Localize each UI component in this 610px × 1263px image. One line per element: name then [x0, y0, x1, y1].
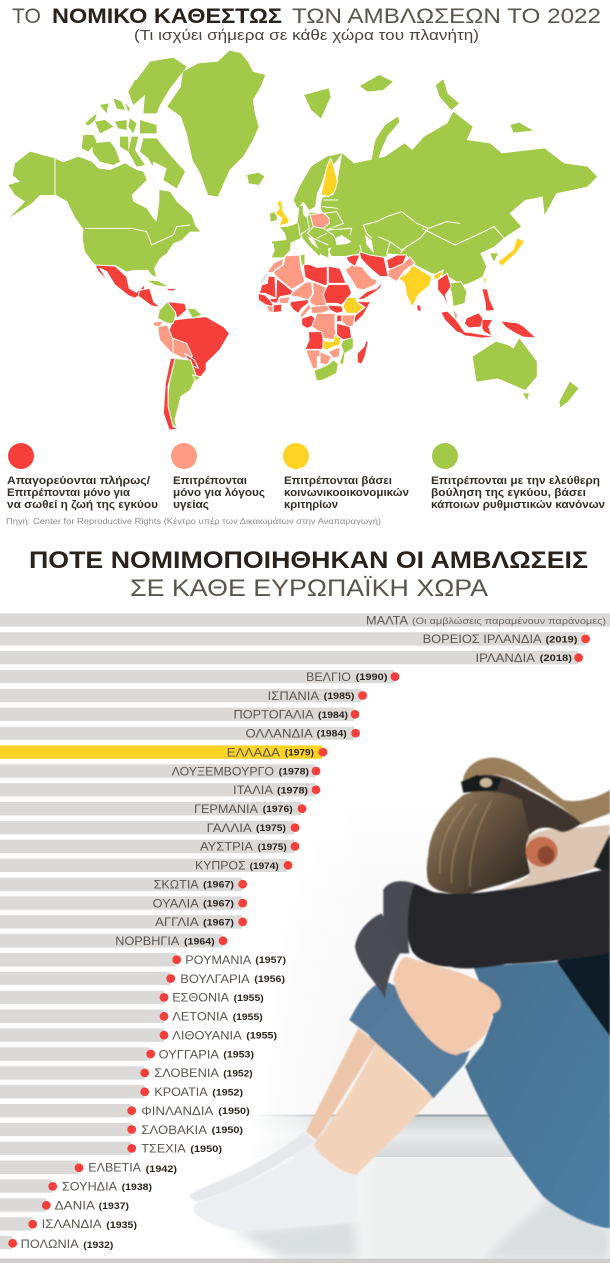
- row: Italy: (1978): [277, 785, 308, 796]
- row: Lithuania: [0, 1028, 277, 1042]
- row: Portugal: [0, 708, 359, 722]
- mongolia and china borders: [422, 227, 506, 245]
- row: Latvia: ΛΕΤΟΝΙΑ: [172, 1010, 228, 1024]
- black sea and caspian: [335, 235, 374, 253]
- legend item: green: βούληση της εγκύου, βάσει: [431, 487, 586, 499]
- row: France: (1975): [256, 823, 286, 834]
- row: Latvia: (1955): [233, 1012, 263, 1023]
- greenland: [167, 51, 265, 197]
- row: Malta: [0, 613, 610, 627]
- row: Estonia: [0, 991, 264, 1005]
- row: France: [0, 821, 299, 835]
- legend item: yellow: [283, 443, 409, 511]
- row: Greece (highlight): [0, 745, 327, 759]
- row: Romania: (1957): [255, 955, 286, 966]
- scandinavia: [294, 153, 342, 210]
- south america: [167, 317, 230, 380]
- row: Romania: [0, 953, 286, 967]
- title: ΝΟΜΙΚΟ ΚΑΘΕΣΤΩΣ: [52, 5, 282, 28]
- row: Croatia: ΚΡΟΑΤΙΑ: [154, 1085, 208, 1099]
- legend item: yellow: κριτηρίων: [284, 499, 338, 511]
- row: Northern Ireland: ΒΟΡΕΙΟΣ ΙΡΛΑΝΔΙΑ: [423, 632, 542, 646]
- row: Greece (highlight): (1979): [285, 748, 314, 759]
- row: Slovenia: (1952): [223, 1068, 253, 1079]
- row: Switzerland: (1942): [146, 1164, 177, 1175]
- source: Πηγή: Center for Reproductive Rights (Κέντρο υπέρ των Δικαιωμάτων στην Αναπαραγωγή): [6, 516, 381, 526]
- row: Portugal: ΠΟΡΤΟΓΑΛΙΑ: [234, 708, 314, 722]
- row: Denmark: [0, 1198, 129, 1212]
- row: Wales: (1967): [203, 899, 234, 910]
- row: Wales: [0, 896, 247, 910]
- row: Denmark: ΔΑΝΙΑ: [55, 1198, 95, 1212]
- row: Northern Ireland: (2019): [546, 634, 578, 645]
- north america and arctic islands: [8, 58, 200, 277]
- row: Spain: (1985): [324, 691, 354, 702]
- legend item: salmon: Επιτρέπονται: [173, 475, 247, 487]
- legend item: yellow: κοινωνικοοικονομικών: [284, 487, 409, 499]
- row: Sweden: ΣΟΥΗΔΙΑ: [62, 1179, 117, 1193]
- row: Scotland: [0, 878, 247, 892]
- legend item: salmon: υγείας: [173, 499, 209, 511]
- row: Spain: ΙΣΠΑΝΙΑ: [268, 689, 319, 703]
- row: Cyprus: (1974): [250, 861, 279, 872]
- row: Czechia: ΤΣΕΧΙΑ: [141, 1142, 186, 1156]
- row: Estonia: ΕΣΘΟΝΙΑ: [172, 991, 229, 1005]
- row: Slovakia: ΣΛΟΒΑΚΙΑ: [141, 1123, 207, 1137]
- ireland: [270, 212, 277, 222]
- row: Luxembourg: [0, 764, 320, 778]
- row: Spain: [0, 689, 367, 703]
- row: Ireland: (2018): [540, 653, 572, 664]
- photo: seated woman: [0, 758, 610, 1258]
- legend item: yellow: Επιτρέπονται βάσει: [284, 475, 392, 487]
- row: Cyprus: ΚΥΠΡΟΣ: [195, 859, 246, 873]
- row: Norway: ΝΟΡΒΗΓΙΑ: [115, 934, 179, 948]
- row: Croatia: [0, 1085, 243, 1099]
- row: Italy: ΙΤΑΛΙΑ: [233, 783, 273, 797]
- world map: [8, 51, 597, 430]
- row: Germany: (1976): [263, 804, 293, 815]
- legend item: salmon: [171, 443, 265, 511]
- northern islands: [247, 75, 533, 185]
- section heading: ΣΕ ΚΑΘΕ ΕΥΡΩΠΑΪΚΗ ΧΩΡΑ: [130, 575, 488, 602]
- row: Estonia: (1955): [234, 993, 264, 1004]
- row: Poland: (1932): [83, 1240, 113, 1251]
- row: Slovakia: [0, 1123, 243, 1137]
- row: Netherlands: ΟΛΛΑΝΔΙΑ: [246, 726, 313, 740]
- foxe basin, borders and mexico: [55, 158, 190, 298]
- row: Switzerland: [0, 1161, 177, 1175]
- row: Germany: [0, 802, 306, 816]
- legend item: red: Απαγορεύονται πλήρως/: [7, 475, 150, 487]
- row: Iceland: [0, 1217, 137, 1231]
- row: Sweden: [0, 1179, 152, 1193]
- row: Poland: [0, 1236, 113, 1251]
- title: ΤΩΝ ΑΜΒΛΩΣΕΩΝ ΤΟ 2022: [292, 5, 601, 28]
- legend item: red: [7, 443, 158, 511]
- row: Lithuania: ΛΙΘΟΥΑΝΙΑ: [172, 1028, 242, 1042]
- row: Ireland: [0, 651, 583, 665]
- legend item: green: [431, 443, 605, 511]
- legend item: salmon: μόνο για λόγους: [173, 487, 265, 499]
- bottom band: [0, 1258, 610, 1263]
- row: Croatia: (1952): [212, 1087, 243, 1098]
- row: Austria: [0, 840, 299, 854]
- uk: [275, 201, 289, 226]
- legend item: green: Επιτρέπονται με την ελεύθερη: [431, 475, 600, 487]
- legend item: green: κάποιων ρυθμιστικών κανόνων: [431, 499, 605, 511]
- row: Denmark: (1937): [99, 1201, 129, 1212]
- row: Czechia: [0, 1142, 222, 1156]
- row: Ireland: ΙΡΛΑΝΔΙΑ: [476, 651, 535, 665]
- bar chart: years by country: [0, 613, 610, 1251]
- row: Norway: (1964): [184, 936, 215, 947]
- subtitle: (Τι ισχύει σήμερα σε κάθε χώρα του πλανήτη): [134, 27, 479, 44]
- row: Scotland: ΣΚΩΤΙΑ: [154, 878, 199, 892]
- legend item: red: να σωθεί η ζωή της εγκύου: [7, 499, 158, 511]
- row: Iceland: ΙΣΛΑΝΔΙΑ: [42, 1217, 102, 1231]
- row: Greece (highlight): ΕΛΛΑΔΑ: [227, 745, 280, 759]
- row: Romania: ΡΟΥΜΑΝΙΑ: [185, 953, 251, 967]
- row: Poland: ΠΟΛΩΝΙΑ: [21, 1237, 79, 1251]
- legend item: red: Επιτρέπονται μόνο για: [7, 487, 130, 499]
- finland: [321, 158, 338, 197]
- row: Slovenia: [0, 1066, 253, 1080]
- row: Malta: (Οι αμβλώσεις παραμένουν παράνομες): [412, 616, 606, 627]
- row: Austria: ΑΥΣΤΡΙΑ: [200, 840, 253, 854]
- row: England: [0, 915, 247, 929]
- row: Belgium: ΒΕΛΓΙΟ: [306, 670, 351, 684]
- central america and hispaniola: [138, 288, 176, 307]
- row: Austria: (1975): [258, 842, 287, 853]
- row: Bulgaria: (1956): [254, 974, 285, 985]
- africa and middle east: [258, 252, 415, 381]
- row: Slovenia: ΣΛΟΒΕΝΙΑ: [154, 1066, 219, 1080]
- row: Luxembourg: (1978): [279, 766, 309, 778]
- row: Sweden: (1938): [122, 1182, 152, 1193]
- section heading: ΠΟΤΕ ΝΟΜΙΜΟΠΟΙΗΘΗΚΑΝ ΟΙ ΑΜΒΛΩΣΕΙΣ: [29, 547, 588, 574]
- row: England: (1967): [203, 917, 234, 928]
- row: Bulgaria: ΒΟΥΛΓΑΡΙΑ: [180, 972, 250, 986]
- europe: [272, 183, 387, 257]
- row: Finland: (1950): [218, 1106, 250, 1117]
- row: Latvia: [0, 1010, 263, 1024]
- americas south and asia pacific: [138, 238, 578, 430]
- row: Wales: ΟΥΑΛΙΑ: [153, 896, 199, 910]
- row: Belgium: [0, 670, 399, 684]
- row: Hungary: ΟΥΓΓΑΡΙΑ: [159, 1047, 219, 1061]
- row: Switzerland: ΕΛΒΕΤΙΑ: [88, 1161, 141, 1175]
- row: Czechia: (1950): [190, 1144, 222, 1155]
- row: Italy: [0, 783, 320, 797]
- australia: [473, 338, 537, 390]
- poland: [310, 213, 329, 228]
- row: Bulgaria: [0, 972, 285, 986]
- row: Belgium: (1990): [356, 672, 388, 683]
- row: Netherlands: [0, 726, 360, 740]
- row: Finland: ΦΙΝΛΑΝΔΙΑ: [141, 1104, 213, 1118]
- row: Netherlands: (1984): [317, 729, 347, 740]
- row: Norway: [0, 934, 227, 948]
- row: Finland: [0, 1104, 250, 1118]
- row: Scotland: (1967): [203, 880, 234, 891]
- row: Hungary: (1953): [223, 1050, 254, 1060]
- row: Slovakia: (1950): [212, 1125, 243, 1136]
- east asia islands: [490, 253, 498, 262]
- row: Northern Ireland: [0, 632, 590, 646]
- row: Malta: ΜΑΛΤΑ: [366, 613, 408, 627]
- south and south-east asia: [399, 265, 432, 307]
- section heading: [29, 547, 588, 602]
- row: Cyprus: [0, 859, 292, 873]
- row: Germany: ΓΕΡΜΑΝΙΑ: [194, 802, 258, 816]
- title: [12, 5, 601, 28]
- row: Lithuania: (1955): [246, 1031, 277, 1042]
- row: Luxembourg: ΛΟΥΞΕΜΒΟΥΡΓΟ: [172, 764, 274, 778]
- indonesia and philippines: [442, 289, 535, 338]
- row: England: ΑΓΓΛΙΑ: [155, 915, 199, 929]
- row: France: ΓΑΛΛΙΑ: [207, 821, 252, 835]
- legend: [7, 443, 605, 511]
- seas, borders and european countries: [270, 200, 460, 255]
- row: Portugal: (1984): [318, 710, 348, 721]
- row: Hungary: [0, 1047, 254, 1061]
- cuba: [148, 281, 168, 287]
- row: Iceland: (1935): [106, 1220, 137, 1231]
- russia and asia: [338, 112, 597, 285]
- title: ΤΟ: [12, 5, 41, 28]
